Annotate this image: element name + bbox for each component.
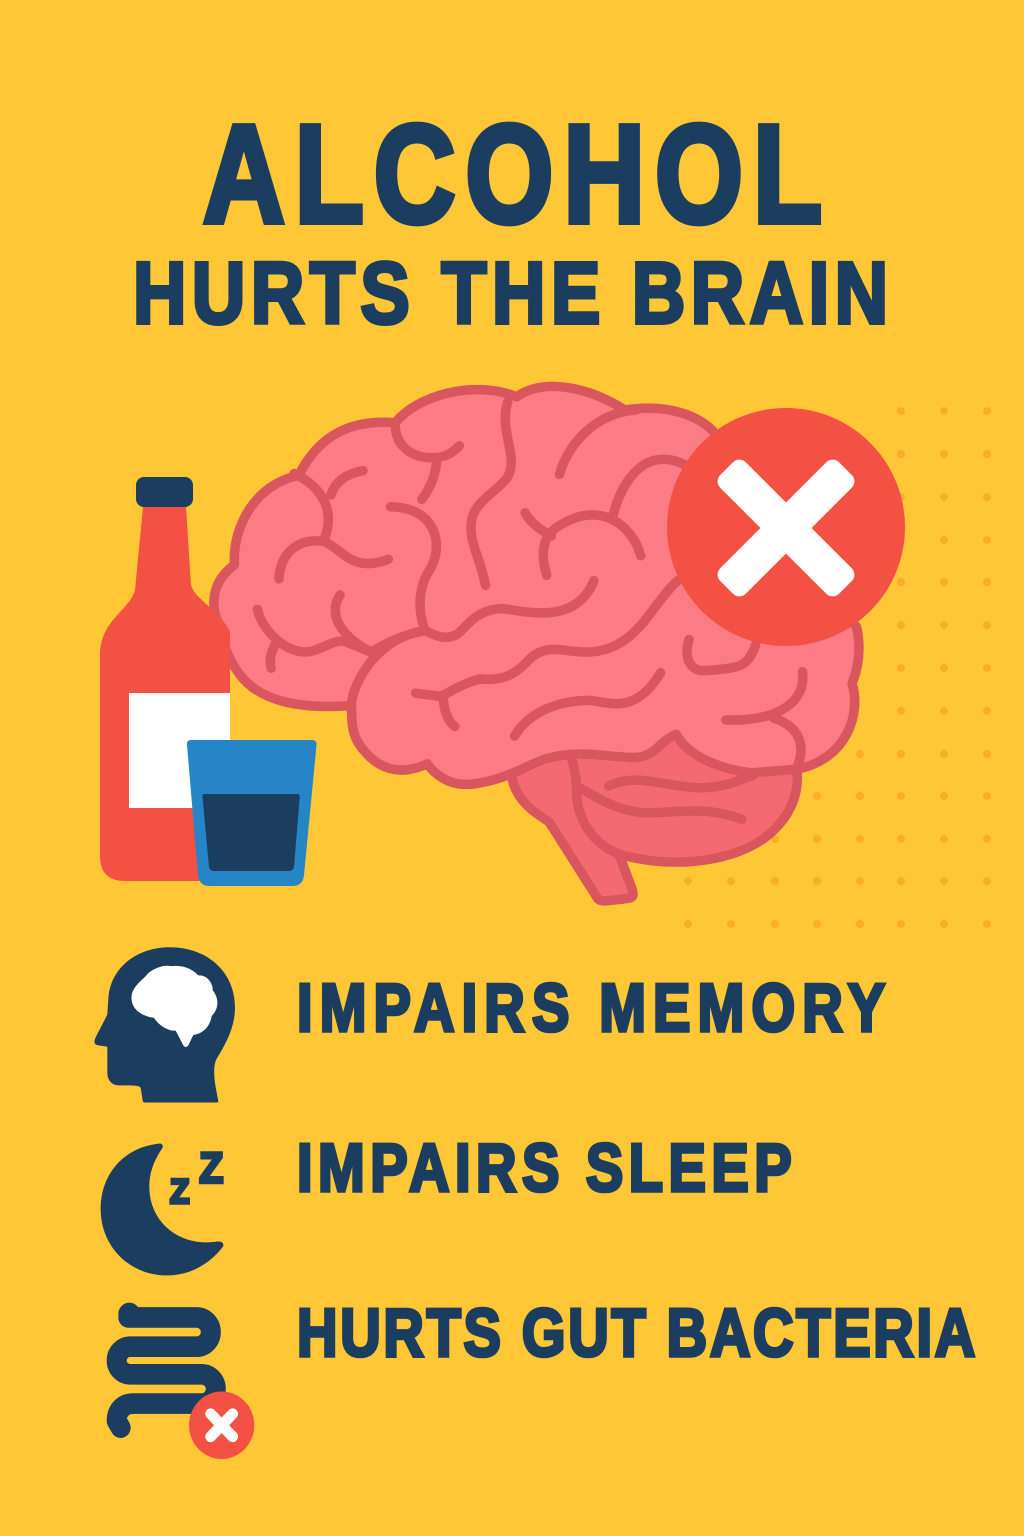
icon: moon with z letters: Z bbox=[199, 1144, 223, 1192]
cerebrum bbox=[214, 386, 859, 784]
icon: moon with z letters: Z bbox=[170, 1172, 189, 1211]
icon: head with brain bbox=[94, 947, 235, 1103]
icon: moon with z letters bbox=[101, 1144, 223, 1275]
list item: hurts gut bacteria bbox=[117, 1296, 975, 1459]
brain illustration bbox=[214, 386, 859, 901]
label: HURTS GUT BACTERIA bbox=[297, 1296, 975, 1371]
label: IMPAIRS MEMORY bbox=[297, 971, 885, 1046]
bottle label bbox=[129, 693, 230, 808]
icon: red circle with white cross bbox=[667, 408, 905, 646]
cerebellum and brain stem bbox=[512, 729, 797, 901]
icon: wine bottle bbox=[100, 477, 230, 881]
list item: impairs sleep bbox=[101, 1131, 792, 1275]
icon: glass bbox=[187, 740, 317, 886]
label: IMPAIRS SLEEP bbox=[297, 1131, 792, 1206]
icon: intestine with red cross badge bbox=[117, 1303, 254, 1459]
subtitle: HURTS THE BRAIN bbox=[133, 245, 888, 342]
list item: impairs memory bbox=[94, 947, 885, 1103]
title bbox=[133, 96, 888, 342]
liquid in glass bbox=[202, 794, 300, 871]
title: ALCOHOL bbox=[203, 96, 822, 252]
bottle cap bbox=[136, 477, 193, 507]
dotted background pattern bbox=[684, 407, 991, 928]
